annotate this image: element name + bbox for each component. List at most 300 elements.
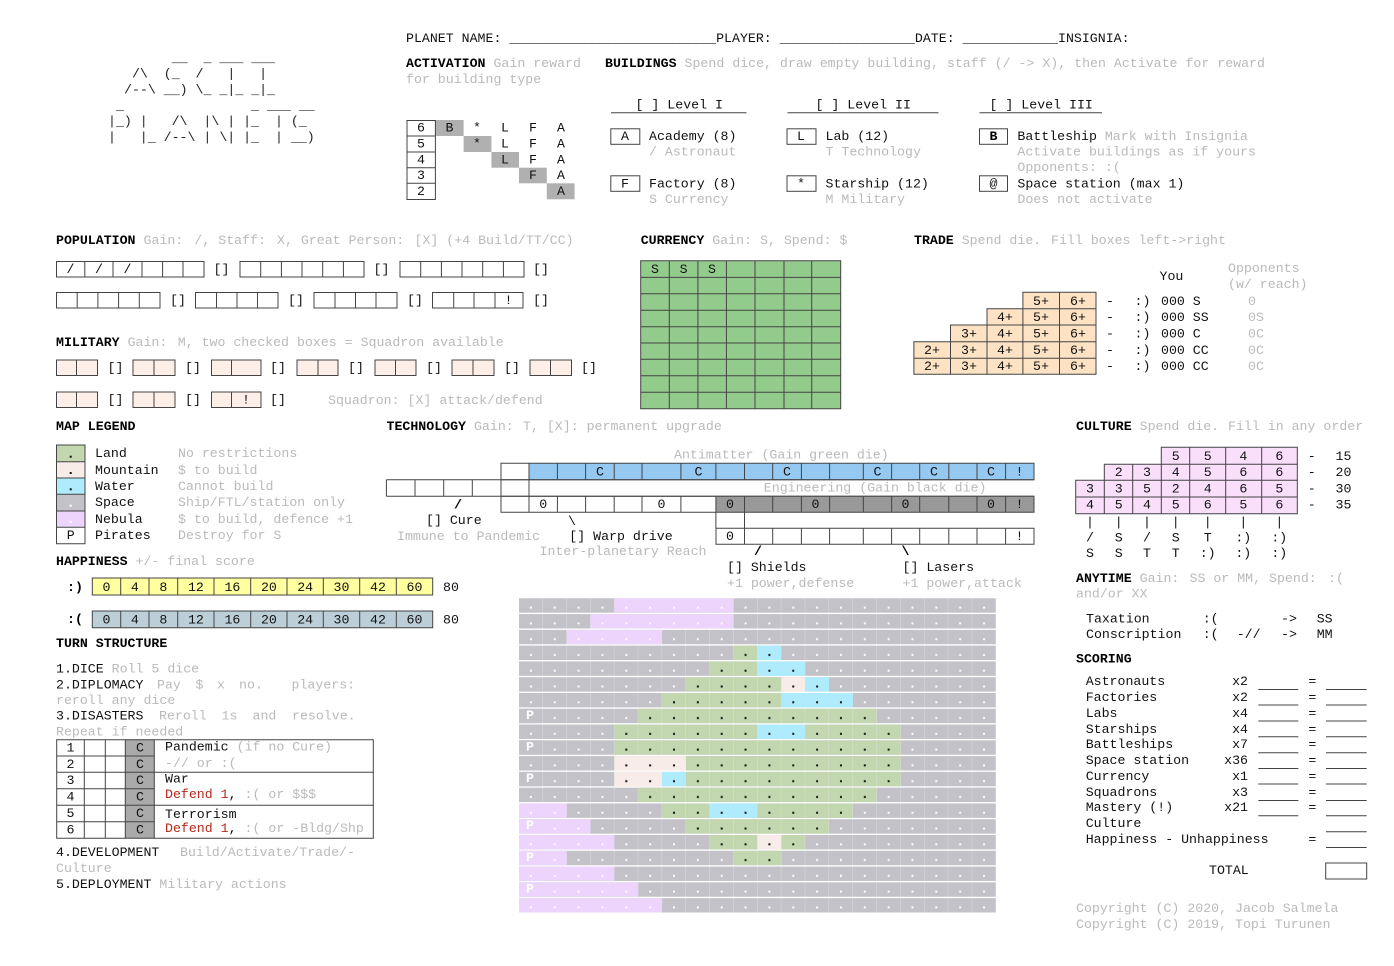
culture table: 4 <box>1143 498 1151 512</box>
scoring rows: x21 <box>1224 800 1248 815</box>
engineering track: 0 <box>812 497 820 512</box>
disaster table: 6 <box>67 822 75 838</box>
steps 1 to 3: Repeat if needed <box>56 724 183 740</box>
culture column rewards: / <box>1143 530 1151 546</box>
building: battleship: Activate buildings as if yours <box>1017 144 1256 160</box>
map grid <box>519 598 996 913</box>
culture table: 5 <box>1204 465 1212 480</box>
disaster table: C <box>136 773 144 788</box>
population track row 2: ! <box>505 293 512 308</box>
culture column rewards: | <box>1143 515 1151 530</box>
anytime note: and/or XX <box>1076 586 1148 602</box>
military row 2 labels: ! <box>242 392 250 408</box>
copyright <box>1076 901 1338 932</box>
anytime actions: -> <box>1281 612 1297 626</box>
copyright: Copyright (C) 2019, Topi Turunen <box>1076 917 1330 932</box>
panel: trade <box>914 233 1308 374</box>
culture column rewards: S <box>1115 546 1123 561</box>
copyright: Copyright (C) 2020, Jacob Salmela <box>1076 901 1338 916</box>
title: ASCII PLANETS: |_) | /\ |\ | |_ | (_ <box>108 114 307 129</box>
buildings heading: BUILDINGS Spend dice, draw empty building, staff (/ -> X), then Activate for reward <box>605 56 1265 71</box>
antimatter track: C <box>930 464 938 480</box>
scoring rows: = <box>1308 832 1316 847</box>
scoring rows: x4 <box>1232 706 1248 721</box>
culture table: 5 <box>1204 449 1212 464</box>
antimatter track: C <box>987 464 995 480</box>
trade table: 6+ <box>1070 359 1086 374</box>
panel: military <box>56 335 597 408</box>
building: lab: Lab (12) <box>826 129 889 144</box>
military checkboxes row 1: [] <box>108 360 123 376</box>
title: ASCII PLANETS <box>108 50 315 145</box>
culture column rewards: T <box>1172 546 1180 561</box>
culture column rewards: T <box>1204 530 1212 546</box>
building: battleship <box>980 129 1256 175</box>
scoring rows: Happiness - Unhappiness <box>1086 832 1269 847</box>
steps 1 to 3: Reroll <box>159 708 207 724</box>
trade rewards: :) <box>1134 359 1150 374</box>
activation table: F <box>529 168 537 183</box>
upgrade: warp drive: Inter-planetary Reach <box>540 544 706 559</box>
total box: TOTAL <box>1209 863 1249 878</box>
culture column rewards: | <box>1115 515 1123 530</box>
scoring rows: x4 <box>1232 722 1248 737</box>
legend labels: Space <box>95 495 135 510</box>
trade rewards: 0S <box>1248 310 1264 325</box>
disaster table: C <box>136 740 144 756</box>
upgrade: lasers: +1 power,attack <box>902 576 1022 591</box>
upgrade: lasers: \ <box>902 544 910 559</box>
map grid: P <box>526 881 534 896</box>
trade table: 4+ <box>997 343 1013 358</box>
steps 1 to 3: x <box>217 678 225 692</box>
scoring rows: x2 <box>1232 674 1248 689</box>
culture table: 4 <box>1204 482 1212 496</box>
population track row 1: / <box>95 262 103 277</box>
disaster table: 2 <box>67 757 75 772</box>
culture column rewards: :) <box>1235 546 1251 561</box>
disaster table: 1 <box>67 740 75 756</box>
building: starship: * <box>797 176 805 191</box>
culture row scores: - <box>1308 498 1316 512</box>
panel: buildings <box>605 56 1265 207</box>
technology heading: T, [X]: permanent upgrade <box>523 419 722 434</box>
trade rewards: - <box>1106 310 1114 325</box>
upgrade: cure <box>397 498 540 544</box>
building: battleship: B <box>990 129 998 144</box>
anytime actions: :( <box>1203 612 1219 626</box>
scoring rows: Battleships <box>1086 737 1173 752</box>
culture table: 4 <box>1086 498 1094 512</box>
trade column headers <box>1160 261 1308 292</box>
activation table: F <box>529 121 537 136</box>
culture row scores: 20 <box>1336 465 1351 480</box>
culture table: 5 <box>1115 498 1123 512</box>
culture table <box>1076 447 1297 514</box>
population heading: /, Staff: <box>194 233 266 248</box>
building: lab <box>787 129 921 160</box>
culture table: 4 <box>1172 465 1180 480</box>
culture column rewards: | <box>1275 515 1283 530</box>
culture row scores: - <box>1308 482 1316 496</box>
trade column headers: You <box>1160 269 1183 284</box>
population heading: [X] (+4 Build/TT/CC) <box>414 233 574 248</box>
trade rewards: :) <box>1134 326 1150 342</box>
scoring rows: Astronauts <box>1086 674 1165 689</box>
legend labels: $ to build, defence +1 <box>178 512 353 527</box>
panel: culture <box>1076 419 1363 561</box>
technology heading: TECHNOLOGY Gain: <box>386 419 514 434</box>
culture table: 5 <box>1172 449 1180 464</box>
trade heading: Fill boxes left->right <box>1051 233 1226 248</box>
happiness track: 0 <box>103 580 111 595</box>
upgrade: shields <box>727 544 854 591</box>
culture row scores: - <box>1308 449 1316 464</box>
anytime actions: -// <box>1237 627 1261 642</box>
activation description: for building type <box>406 72 541 87</box>
unhappiness track: 0 <box>103 612 111 628</box>
steps 1 to 3: reroll any dice <box>56 693 175 708</box>
activation table: A <box>557 121 565 136</box>
steps 1 to 3: 3.DISASTERS <box>56 708 144 724</box>
building: academy <box>611 129 736 160</box>
happiness track: 24 <box>297 580 313 595</box>
culture row scores: - <box>1308 465 1316 480</box>
legend swatches: P <box>67 528 75 543</box>
legend labels: Water <box>95 479 135 494</box>
panel: anytime <box>1076 571 1344 642</box>
disaster table: Terrorism <box>165 807 237 822</box>
map grid: P <box>526 818 534 833</box>
currency grid: S <box>680 262 688 277</box>
military checkboxes row 1: [] <box>185 360 201 376</box>
building: space station: Does not activate <box>1017 192 1153 207</box>
culture row scores <box>1308 449 1351 512</box>
population track row 2: [] <box>170 293 186 308</box>
anytime actions: Taxation <box>1086 612 1150 626</box>
upgrade: lasers: [] Lasers <box>902 560 974 575</box>
trade table: 2+ <box>924 343 940 358</box>
building: factory: F <box>621 176 629 191</box>
population track row 2: [] <box>288 293 304 308</box>
title: ASCII PLANETS: | |_ /--\ | \| |_ | __) <box>108 130 315 145</box>
culture heading: Fill in any order <box>1228 419 1363 434</box>
building: starship <box>787 176 929 207</box>
trade rewards: :) <box>1134 343 1150 358</box>
military checkboxes row 1: [] <box>270 360 286 376</box>
engineering track: 0 <box>539 497 547 512</box>
upgrade: cure: [] Cure <box>426 513 482 528</box>
happiness track: 4 <box>131 580 139 595</box>
culture heading: CULTURE Spend die. <box>1076 419 1219 434</box>
unhappiness track: 20 <box>261 612 277 628</box>
legend labels: Destroy for S <box>178 528 281 543</box>
population track row 1: [] <box>214 262 229 277</box>
culture table: 6 <box>1275 465 1283 480</box>
population track row 1: [] <box>374 262 389 277</box>
military track row 2 <box>56 392 261 408</box>
steps 4 and 5: Build/Activate/Trade/- <box>180 845 355 860</box>
trade rewards: :) <box>1134 310 1150 325</box>
anytime actions: MM <box>1317 627 1333 642</box>
panel: currency <box>641 233 847 409</box>
activation table: * <box>473 121 481 136</box>
title: ASCII PLANETS: /\ (_ / | | <box>124 66 267 82</box>
culture table: 6 <box>1275 498 1283 512</box>
lower track <box>716 528 1034 544</box>
population track row 1: / <box>124 262 132 277</box>
military row 2 labels <box>108 392 543 408</box>
disaster table: War <box>165 772 189 786</box>
happiness track: 42 <box>370 580 386 595</box>
trade table: 6+ <box>1070 326 1086 342</box>
trade table: 6+ <box>1070 310 1086 325</box>
trade column headers: (w/ reach) <box>1228 277 1308 292</box>
building: starship: Starship (12) <box>826 176 929 191</box>
engineering track: 0 <box>726 497 734 512</box>
disaster table: C <box>136 822 144 838</box>
unhappiness track: :( <box>67 612 83 627</box>
scoring rows <box>1086 674 1367 848</box>
population track row 2 <box>56 292 549 308</box>
scoring rows: Starships <box>1086 722 1157 737</box>
scoring rows: = <box>1308 785 1316 800</box>
happiness track: 30 <box>334 580 349 595</box>
currency grid <box>641 261 841 409</box>
steps 1 to 3: resolve. <box>292 708 356 724</box>
trade table: 6+ <box>1070 343 1086 358</box>
population track row 1: [] <box>533 262 549 277</box>
trade rewards: - <box>1106 343 1114 358</box>
engineering track: 0 <box>658 497 666 512</box>
culture row scores: 35 <box>1336 498 1351 512</box>
building: battleship: Opponents: :( <box>1017 160 1121 175</box>
building: space station: Space station (max 1) <box>1017 176 1184 191</box>
scoring rows: Currency <box>1086 769 1149 784</box>
culture column rewards: | <box>1086 515 1094 530</box>
culture row scores: 15 <box>1336 449 1351 464</box>
scoring rows: = <box>1308 800 1316 815</box>
disaster table: -// or :( <box>165 756 237 771</box>
trade rewards <box>1106 294 1264 374</box>
scoring rows: x1 <box>1232 769 1248 784</box>
culture table: 5 <box>1275 482 1283 496</box>
currency grid: S <box>651 262 659 277</box>
trade table <box>914 292 1096 374</box>
panel: scoring <box>1076 652 1367 879</box>
lower track: ! <box>1016 529 1023 544</box>
culture column rewards: :) <box>1235 530 1251 546</box>
scoring rows: x36 <box>1224 753 1248 768</box>
culture table: 3 <box>1115 482 1123 496</box>
map legend heading: MAP LEGEND <box>56 419 136 434</box>
activation table: L <box>501 136 509 152</box>
population heading: Gain: <box>144 233 183 248</box>
building: lab: T Technology <box>826 144 921 160</box>
steps 4 and 5: 5.DEPLOYMENT Military actions <box>56 877 287 892</box>
antimatter track <box>501 448 1034 480</box>
culture column rewards: :) <box>1200 546 1216 561</box>
culture column rewards: | <box>1204 515 1212 530</box>
anytime actions: :( <box>1203 627 1219 642</box>
scoring rows: = <box>1308 753 1316 768</box>
disaster table <box>57 739 373 838</box>
population track row 2: [] <box>533 293 549 308</box>
upgrade: warp drive: [] Warp drive <box>569 529 673 544</box>
steps 1 to 3: no. <box>239 678 263 692</box>
trade table: 4+ <box>997 310 1013 325</box>
trade rewards: 0C <box>1248 326 1264 342</box>
culture table: 3 <box>1143 465 1151 480</box>
unhappiness track: 60 <box>407 612 422 628</box>
unhappiness track: 16 <box>224 612 240 628</box>
disaster table: 3 <box>67 773 75 788</box>
antimatter track: C <box>695 464 703 480</box>
map grid: P <box>526 850 534 865</box>
activation table: 2 <box>417 184 425 199</box>
steps 1 to 3: and <box>252 708 276 724</box>
culture table: 6 <box>1239 482 1247 496</box>
building: space station <box>980 176 1184 207</box>
steps 4 and 5: 4.DEVELOPMENT <box>56 845 159 860</box>
military checkboxes row 1: [] <box>348 360 364 376</box>
level headings: [ ] Level III <box>990 97 1093 112</box>
scoring heading: SCORING <box>1076 652 1132 667</box>
currency heading: CURRENCY Gain: S, Spend: $ <box>641 233 847 248</box>
upgrade: cure: Immune to Pandemic <box>397 529 540 544</box>
anytime heading: SS or MM, Spend: <box>1190 571 1317 586</box>
culture column rewards: / <box>1086 530 1094 546</box>
legend labels: Land <box>95 446 127 461</box>
unhappiness track: 12 <box>188 612 204 628</box>
steps 1 to 3: 1.DICE Roll 5 dice <box>56 662 199 677</box>
anytime heading: :( <box>1328 571 1344 586</box>
trade column headers: Opponents <box>1228 261 1300 276</box>
culture table: 6 <box>1204 498 1212 512</box>
scoring rows: Mastery (!) <box>1086 800 1173 815</box>
disaster table: C <box>136 790 144 804</box>
steps 4 and 5: Culture <box>56 861 112 876</box>
scoring rows: Space station <box>1086 753 1189 768</box>
military row 2 labels: [] <box>270 392 286 408</box>
level headings: [ ] Level I <box>636 97 723 112</box>
culture column rewards: :) <box>1271 530 1287 546</box>
legend labels: Nebula <box>95 512 143 527</box>
scoring rows: x2 <box>1232 690 1248 705</box>
unhappiness track: 24 <box>297 612 313 628</box>
legend labels: No restrictions <box>178 446 297 461</box>
culture column rewards: S <box>1172 530 1180 546</box>
trade table: 2+ <box>924 359 940 374</box>
panel: happiness <box>56 554 459 628</box>
disaster table: C <box>136 806 144 821</box>
steps 4 and 5 <box>56 845 355 892</box>
steps 1 to 3: 2.DIPLOMACY <box>56 678 144 692</box>
scoring rows: = <box>1308 722 1316 737</box>
steps 1 to 3: players: <box>292 678 355 692</box>
culture table: 5 <box>1172 498 1180 512</box>
scoring rows: Culture <box>1086 816 1141 831</box>
culture column rewards: S <box>1086 546 1094 561</box>
population track row 1 <box>56 262 549 277</box>
player info header line: PLANET NAME: __________________________PLAYER: _________________DATE: ____________INSIGNIA: <box>406 31 1130 46</box>
trade heading: TRADE Spend die. <box>914 233 1041 248</box>
level headings <box>611 97 1102 113</box>
legend labels: $ to build <box>178 463 258 478</box>
trade rewards: - <box>1106 294 1114 309</box>
military row 2 labels: Squadron: [X] attack/defend <box>328 393 543 408</box>
engineering track: ! <box>1016 497 1023 512</box>
legend labels: Cannot build <box>178 479 273 494</box>
building: starship: M Military <box>826 192 905 207</box>
antimatter track: Antimatter (Gain green die) <box>674 448 889 462</box>
antimatter track: C <box>783 464 791 480</box>
happiness track: 16 <box>224 580 240 595</box>
disaster table: Defend 1, :( or $$$ <box>165 787 316 802</box>
activation heading: ACTIVATION Gain reward <box>406 56 581 71</box>
culture row scores: 30 <box>1336 482 1351 496</box>
building: academy: Academy (8) <box>649 129 736 144</box>
military checkboxes row 1: [] <box>581 360 597 376</box>
anytime actions: Conscription <box>1086 627 1181 642</box>
culture column rewards: :) <box>1271 546 1287 561</box>
trade rewards: 000 CC <box>1161 359 1209 374</box>
steps 1 to 3: Pay <box>157 678 181 692</box>
title: ASCII PLANETS: _ _ ___ __ <box>108 98 315 113</box>
building: space station: @ <box>990 176 998 191</box>
trade rewards: - <box>1106 359 1114 374</box>
engineering track <box>386 480 1034 528</box>
panel: turn structure <box>56 636 373 892</box>
title: ASCII PLANETS: __ _ ___ ___ <box>124 50 275 66</box>
disaster table: 5 <box>67 806 75 821</box>
engineering track: 0 <box>987 497 995 512</box>
trade rewards: 0 <box>1248 294 1256 309</box>
trade table: 4+ <box>997 359 1013 374</box>
scoring rows: x3 <box>1232 785 1248 800</box>
anytime actions <box>1086 612 1333 642</box>
steps 1 to 3: 1s <box>222 708 237 724</box>
disaster table: Defend 1, :( or -Bldg/Shp <box>165 821 364 836</box>
upgrade: warp drive <box>540 514 706 559</box>
scoring rows: Factories <box>1086 690 1157 705</box>
upgrade: cure: / <box>454 498 462 512</box>
building: academy: A <box>621 129 629 144</box>
trade table: 5+ <box>1033 359 1049 374</box>
building: battleship: Battleship Mark with Insignia <box>1017 129 1248 144</box>
trade table: 5+ <box>1033 294 1049 309</box>
population heading: POPULATION <box>56 233 136 248</box>
happiness track: 12 <box>188 580 204 595</box>
building: factory: S Currency <box>649 192 729 207</box>
military checkboxes row 1: [] <box>504 360 520 376</box>
trade rewards: 000 S <box>1161 294 1201 309</box>
happiness track: 80 <box>443 580 459 595</box>
culture table: 5 <box>1239 498 1247 512</box>
scoring rows: Labs <box>1086 706 1118 721</box>
trade rewards: :) <box>1134 294 1150 309</box>
culture table: 2 <box>1115 465 1123 480</box>
building: factory <box>611 176 736 207</box>
anytime heading: ANYTIME Gain: <box>1076 571 1179 586</box>
trade rewards: 000 CC <box>1161 343 1209 358</box>
unhappiness track: 42 <box>370 612 386 628</box>
upgrade: shields: / <box>754 544 762 559</box>
map grid: P <box>526 739 534 754</box>
building: factory: Factory (8) <box>649 176 736 191</box>
currency grid: S <box>708 262 716 277</box>
scoring rows: = <box>1308 674 1316 689</box>
